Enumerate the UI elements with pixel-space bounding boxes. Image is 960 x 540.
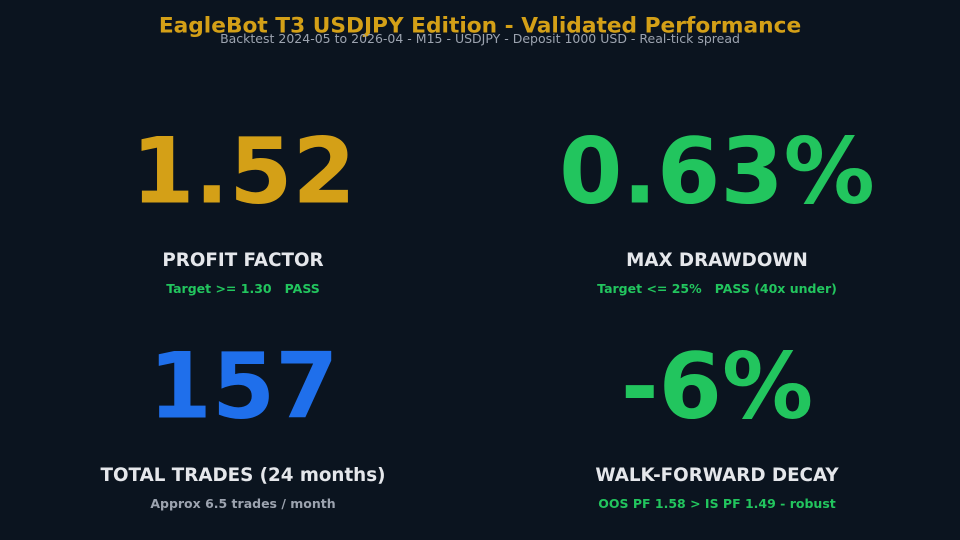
panel: walk-forward decay <box>595 334 839 511</box>
subtitle: Backtest 2024-05 to 2026-04 - M15 - USDJPY - Deposit 1000 USD - Real-tick spread <box>220 31 740 46</box>
metric label: max drawdown: MAX DRAWDOWN <box>626 250 808 271</box>
panel: total trades <box>101 334 385 511</box>
metric value: walk-forward decay: -6% <box>621 334 813 440</box>
panel: profit factor <box>131 120 356 296</box>
metric label: walk-forward decay: WALK-FORWARD DECAY <box>595 465 839 486</box>
metric label: total trades: TOTAL TRADES (24 months) <box>101 465 385 486</box>
metric value: max drawdown: 0.63% <box>559 120 875 224</box>
title: EagleBot T3 USDJPY Edition - Validated Performance <box>159 14 801 38</box>
metric label: profit factor: PROFIT FACTOR <box>162 250 324 271</box>
metric note: trades per month: Approx 6.5 trades / month <box>150 496 336 511</box>
metric note: max drawdown target: Target <= 25% PASS (40x under) <box>597 281 837 296</box>
panel: max drawdown <box>559 120 875 296</box>
metric value: total trades: 157 <box>149 334 338 440</box>
metric note: out-of-sample comparison: OOS PF 1.58 > IS PF 1.49 - robust <box>598 496 836 511</box>
metric value: profit factor: 1.52 <box>131 120 356 224</box>
metric note: profit factor target: Target >= 1.30 PASS <box>166 281 320 296</box>
